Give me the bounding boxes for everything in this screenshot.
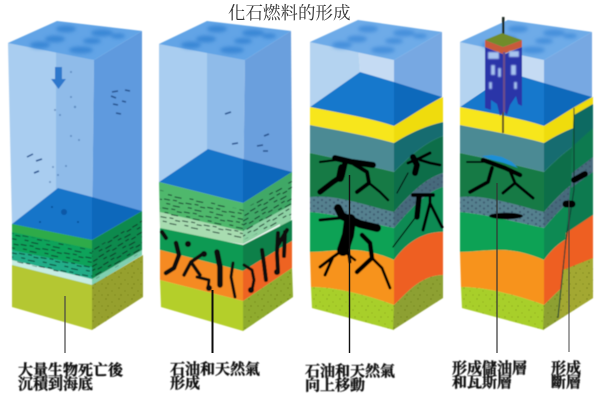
panel: block 1, organisms settle on the sea floor xyxy=(8,21,143,330)
oil reservoir xyxy=(467,160,585,219)
rock strata xyxy=(310,97,443,330)
leader line: block 3 xyxy=(348,175,350,353)
well pipe xyxy=(502,110,504,133)
caption: block 1: 沉積到海底 xyxy=(18,376,93,393)
sea floor xyxy=(159,149,292,203)
oil seeps xyxy=(162,230,287,297)
gas pocket xyxy=(482,155,518,168)
water surface xyxy=(310,20,442,60)
leader line: block 2 xyxy=(212,290,214,353)
leader line: fault xyxy=(568,200,570,352)
caption: block 2: 形成 xyxy=(170,374,200,392)
water surface xyxy=(8,21,142,60)
icon: downward arrow xyxy=(51,67,66,89)
sinking organisms xyxy=(225,112,269,151)
water column xyxy=(159,31,292,203)
olive bedrock xyxy=(160,268,293,331)
water column xyxy=(8,31,142,239)
sea floor xyxy=(12,188,142,240)
caption: block 3: 向上移動 xyxy=(305,376,365,394)
caption: block 2: 石油和天然氣 xyxy=(170,362,260,378)
caption: block 3: 石油和天然氣 xyxy=(305,364,395,380)
sediment layer xyxy=(12,211,142,285)
water column xyxy=(310,32,442,126)
rock strata xyxy=(460,97,593,330)
sea floor xyxy=(310,72,442,126)
caption: block 1: 大量生物死亡後 xyxy=(18,363,123,379)
layered sediment xyxy=(159,172,292,247)
caption: reservoir: 形成儲油層 xyxy=(452,361,527,377)
sea floor xyxy=(460,73,592,126)
orange layer xyxy=(160,241,292,301)
leader line: reservoir xyxy=(496,183,498,353)
caption: fault: 形成 xyxy=(551,361,581,377)
oil migrating upward xyxy=(320,153,442,288)
olive bedrock xyxy=(12,255,143,330)
leader line: block 1 xyxy=(64,296,66,353)
panel: block 4, reservoir and gas layers with oil rig xyxy=(460,17,593,330)
water column xyxy=(460,32,592,126)
caption: reservoir: 和瓦斯層 xyxy=(452,374,512,391)
sinking organisms xyxy=(27,71,130,183)
panel: block 3, oil and gas move upward xyxy=(310,20,443,330)
water surface xyxy=(159,21,291,60)
title: 化石燃料的形成 xyxy=(228,3,350,23)
oil rig xyxy=(485,17,522,116)
panel: block 2, oil and gas form xyxy=(159,21,293,331)
caption: fault: 斷層 xyxy=(551,374,581,391)
fault block shifted upward xyxy=(558,97,593,320)
green layer xyxy=(160,220,292,271)
water surface xyxy=(460,20,592,60)
